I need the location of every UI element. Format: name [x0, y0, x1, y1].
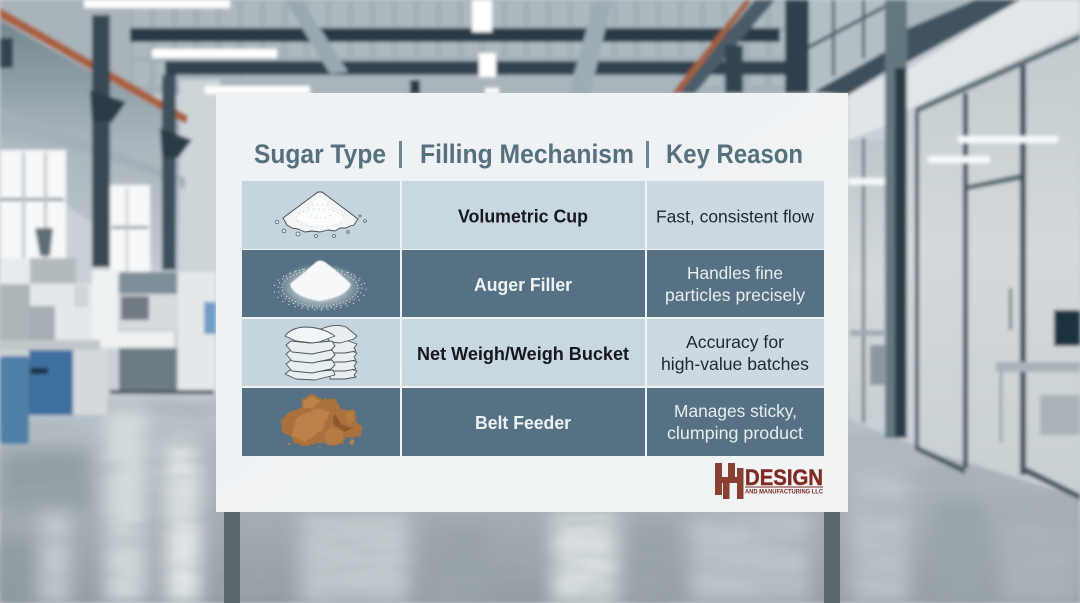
heading: Filling Mechanism: Filling Mechanism: [420, 139, 634, 169]
label: Auger Filler: Auger Filler: [474, 275, 572, 295]
logo: HH Design and Manufacturing LLC: AND MANUFACTURING LLC: [745, 488, 823, 496]
row 4: [242, 388, 824, 456]
floor: [0, 392, 1080, 603]
label: Net Weigh/Weigh Bucket: Net Weigh/Weigh Bucket: [417, 344, 629, 364]
left leg: [224, 512, 240, 603]
reason: Accuracy for high-value batches: Accuracy for: [686, 332, 784, 352]
row 3: [242, 319, 824, 386]
heading: Sugar Type: Sugar Type: [254, 139, 386, 169]
machinery: [0, 228, 216, 444]
icon: brown sugar clumps: [282, 395, 361, 448]
icon: stacked sugar bags: [285, 325, 357, 380]
icon: powdered sugar pile: [274, 260, 366, 311]
right structure: clerestory and columns: [672, 0, 1080, 500]
sign board panel: [216, 93, 848, 512]
logo: HH Design and Manufacturing LLC: [715, 463, 823, 499]
right leg: [824, 512, 840, 603]
heading divider: [399, 141, 402, 168]
sign stand legs: [224, 512, 840, 603]
heading row: [254, 139, 803, 169]
heading: Key Reason: Key Reason: [666, 139, 803, 169]
reason: Accuracy for high-value batches: high-value batches: [661, 354, 809, 374]
logo mark: interlocked H letters: [715, 463, 744, 499]
reason: Manages sticky, clumping product: clumping product: [667, 423, 803, 443]
heading divider: [646, 141, 649, 168]
reason: Handles fine particles precisely: [665, 263, 805, 305]
icon: granulated sugar pile: [275, 192, 366, 238]
ceiling: [110, 0, 810, 96]
row 1: [242, 181, 824, 249]
row 2: [242, 250, 824, 317]
reason: Handles fine particles precisely: Handles fine: [687, 263, 783, 283]
windows: [0, 150, 150, 275]
table: [242, 181, 824, 456]
logo wordmark: DESIGN: [745, 465, 823, 490]
reason: Accuracy for high-value batches: [661, 332, 809, 374]
reason: Handles fine particles precisely: particles precisely: [665, 285, 805, 305]
left wall and beams: [0, 0, 220, 290]
label: Volumetric Cup: Volumetric Cup: [458, 206, 588, 226]
label: Belt Feeder: Belt Feeder: [475, 413, 571, 433]
reason: Fast, consistent flow: Fast, consistent flow: [656, 206, 814, 226]
reason: Manages sticky, clumping product: Manages sticky,: [674, 401, 797, 421]
ceiling lights: [84, 0, 499, 94]
reason: Manages sticky, clumping product: [667, 401, 803, 443]
